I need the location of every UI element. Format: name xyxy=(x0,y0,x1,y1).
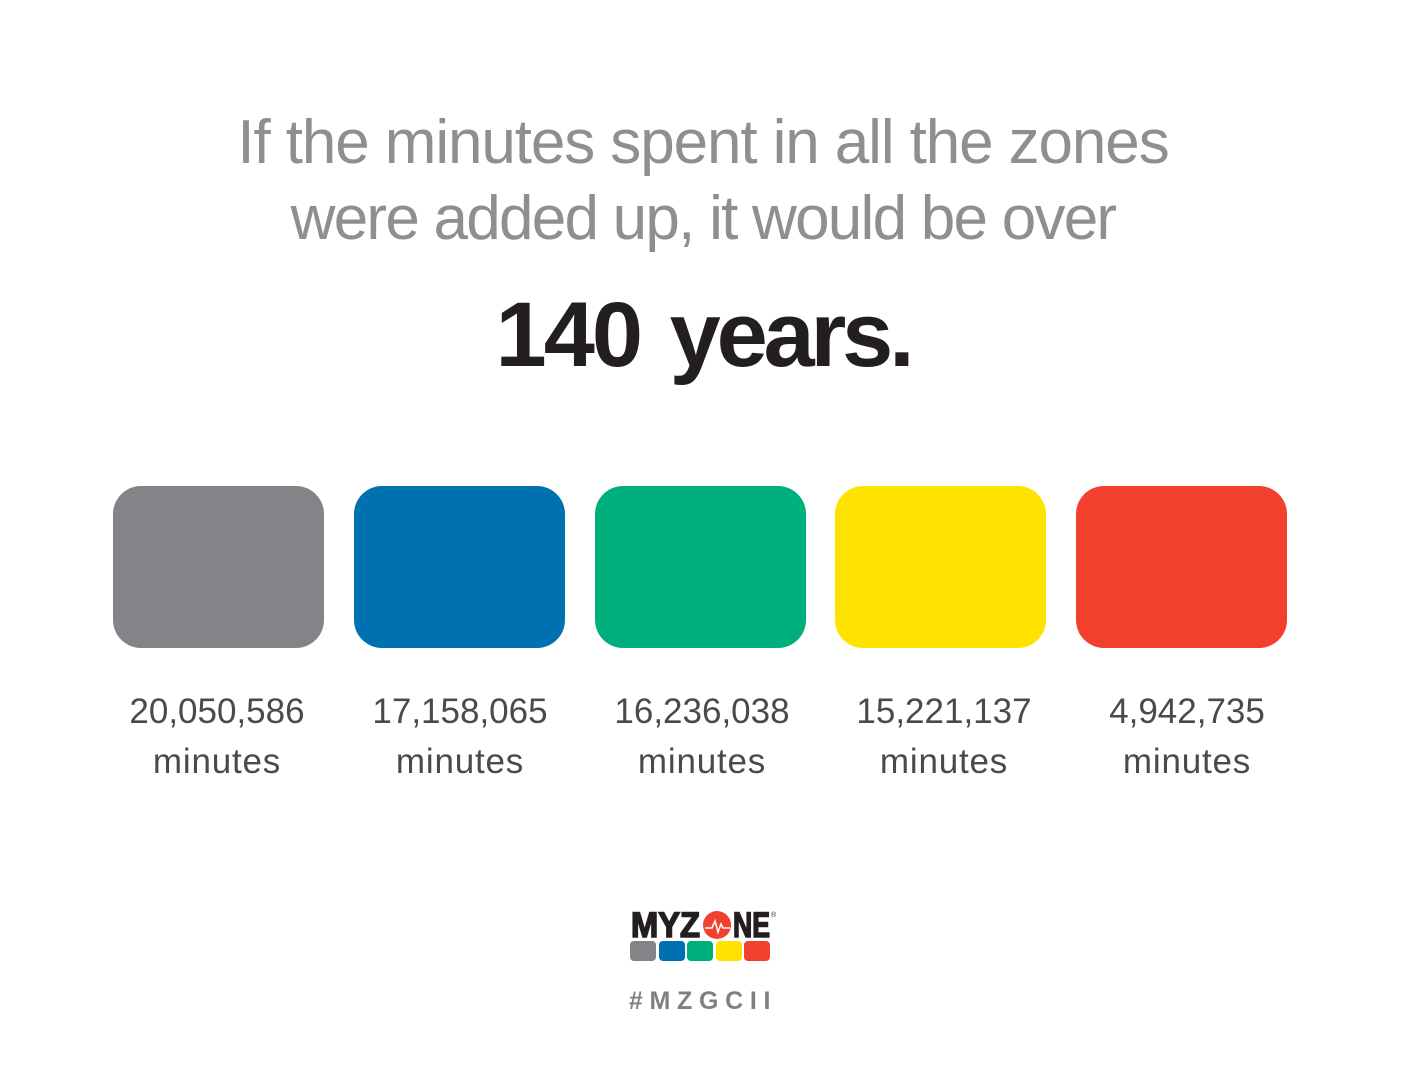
label: grey minutes: minutes xyxy=(153,742,281,781)
label: red minutes: minutes xyxy=(1123,742,1251,781)
label: blue minutes: 17,158,065 xyxy=(372,692,548,731)
label: blue minutes xyxy=(372,692,548,781)
label: grey minutes xyxy=(129,692,305,781)
heading: were added up, it would be over xyxy=(291,184,1115,253)
label: red minutes: 4,942,735 xyxy=(1109,692,1265,731)
label: yellow minutes: minutes xyxy=(880,742,1008,781)
label: green minutes: 16,236,038 xyxy=(614,692,790,731)
label: blue minutes: minutes xyxy=(396,742,524,781)
swatch: green zone xyxy=(595,486,806,648)
label: yellow minutes xyxy=(856,692,1032,781)
swatch: yellow zone xyxy=(835,486,1046,648)
swatch: grey zone xyxy=(113,486,324,648)
logo: MYZONE: ® xyxy=(771,911,777,919)
logo: MYZONE xyxy=(630,908,777,961)
label: yellow minutes: 15,221,137 xyxy=(856,692,1032,731)
swatch: blue zone xyxy=(354,486,565,648)
label: green minutes: minutes xyxy=(638,742,766,781)
heading xyxy=(237,108,1169,253)
headline: 140 years: 140 years. xyxy=(496,284,910,386)
label: grey minutes: 20,050,586 xyxy=(129,692,305,731)
label: green minutes xyxy=(614,692,790,781)
swatch: red zone xyxy=(1076,486,1287,648)
label: red minutes xyxy=(1109,692,1265,781)
hashtag: #MZGCII xyxy=(629,987,777,1015)
heading: If the minutes spent in all the zones xyxy=(237,108,1169,177)
